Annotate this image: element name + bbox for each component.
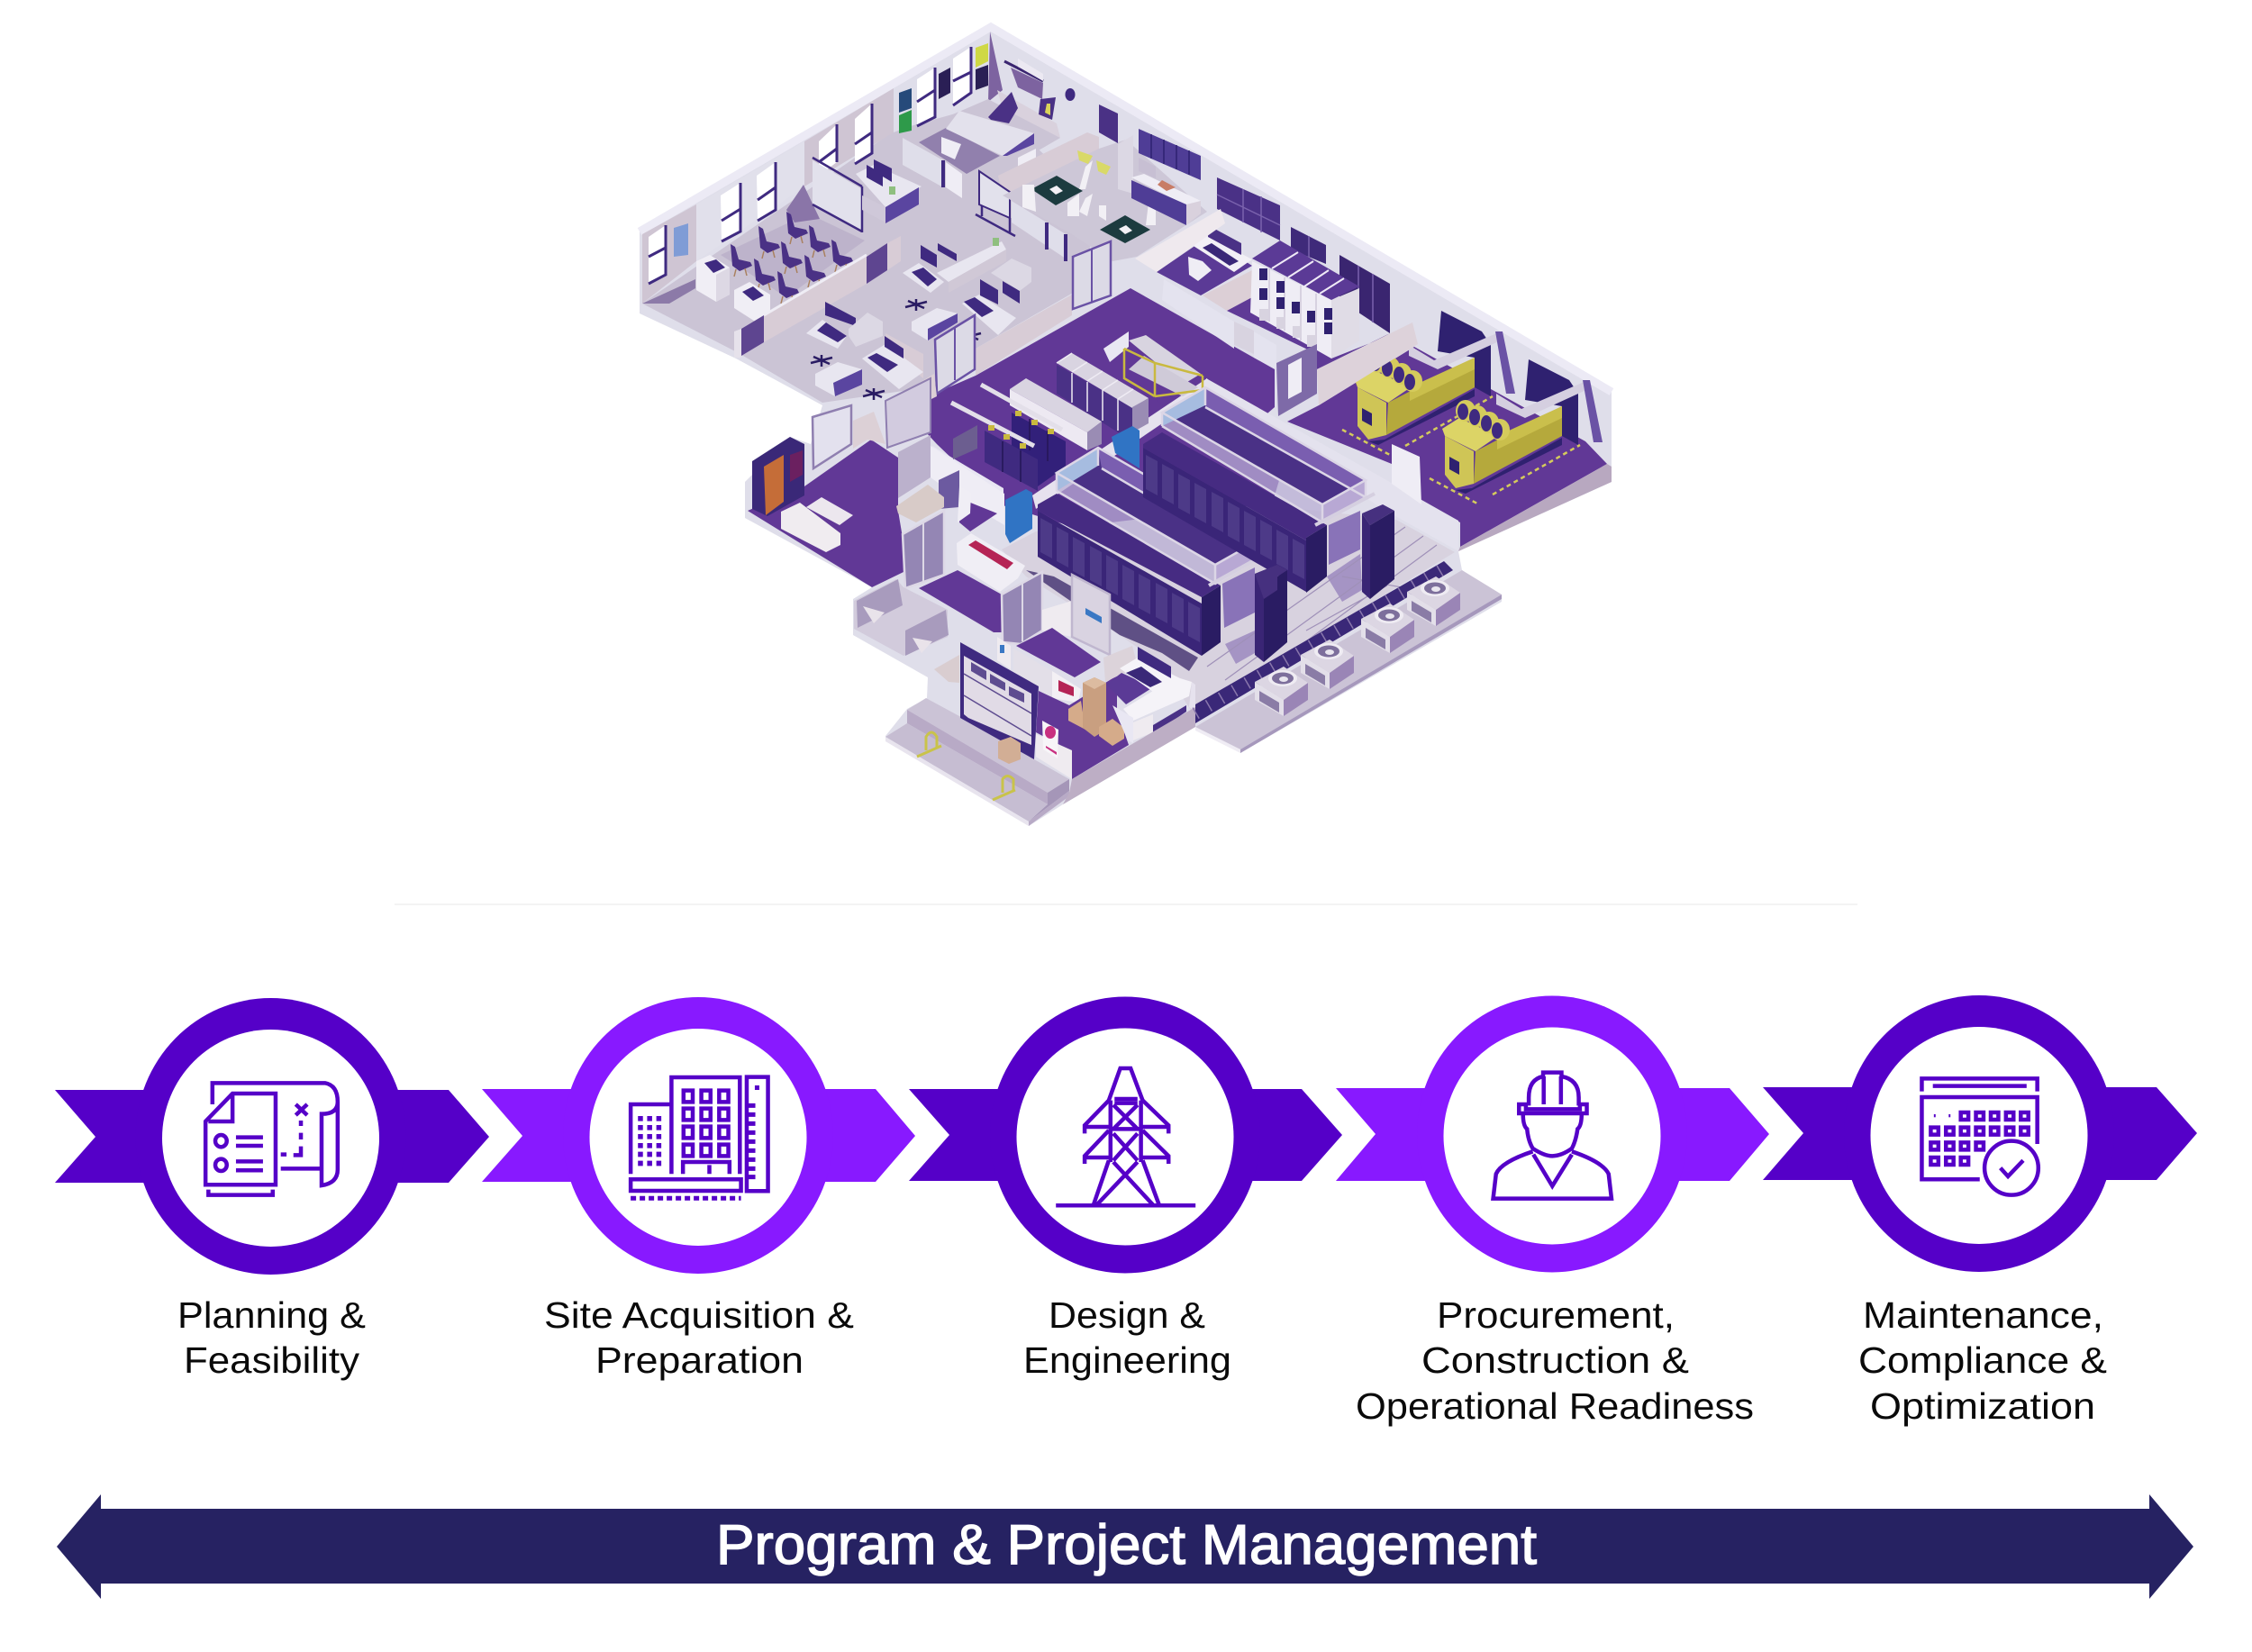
UPS cabinets bbox=[1250, 241, 1359, 359]
icon: buildings and site plan bbox=[631, 1077, 768, 1198]
reception counter lobby bbox=[896, 470, 997, 588]
conference area bbox=[642, 158, 865, 304]
lounge doors and glass bbox=[813, 378, 1004, 525]
double arrow: program and project management bbox=[57, 1494, 2193, 1599]
label 5: Maintenance, bbox=[1863, 1294, 2103, 1336]
cabinet row purple fronts bbox=[1057, 353, 1149, 441]
cafeteria bbox=[1003, 140, 1207, 261]
label 2: Preparation bbox=[595, 1339, 804, 1381]
office floor bbox=[642, 104, 1099, 403]
bollards bbox=[917, 732, 1015, 800]
ribbon 3 bbox=[909, 1089, 1342, 1181]
corridor and server room carpet bbox=[926, 288, 1288, 540]
generators bbox=[1342, 311, 1603, 504]
label 5: Optimization bbox=[1870, 1385, 2095, 1427]
ribbon 2 bbox=[482, 1089, 915, 1182]
label 2: Site Acquisition & bbox=[544, 1294, 854, 1336]
server row B bbox=[1143, 432, 1327, 593]
label 4: Construction & bbox=[1421, 1339, 1689, 1381]
label 3: Engineering bbox=[1023, 1339, 1231, 1381]
circle 2 bbox=[563, 997, 833, 1274]
icon: transmission tower bbox=[1056, 1068, 1195, 1205]
icon: blueprint document bbox=[205, 1083, 338, 1195]
outdoor chiller pad bbox=[1195, 561, 1502, 753]
carpet entry bbox=[1016, 628, 1101, 677]
storage carpet bbox=[1036, 676, 1129, 779]
step 5: maintenance, compliance and optimization bbox=[1763, 995, 2197, 1427]
containment A bbox=[1057, 448, 1266, 628]
chiller units bbox=[1255, 576, 1460, 716]
whiteboard bbox=[976, 171, 1015, 236]
containment B bbox=[1162, 387, 1375, 565]
divider line bbox=[395, 903, 1857, 905]
circle 5 bbox=[1844, 995, 2114, 1272]
label 4: Procurement, bbox=[1437, 1294, 1675, 1336]
vending machines bbox=[752, 437, 804, 516]
main wall to generator room bbox=[1206, 378, 1458, 551]
boxes and signs bbox=[998, 677, 1124, 779]
icon: construction worker bbox=[1494, 1073, 1612, 1199]
step 2: site acquisition and preparation bbox=[482, 997, 915, 1381]
illustration: isometric data center floor plan bbox=[640, 27, 1612, 826]
small office bbox=[1135, 209, 1252, 311]
red seating trough bbox=[957, 533, 1025, 592]
window wall bbox=[642, 32, 1003, 304]
icon: calendar with check bbox=[1921, 1078, 2039, 1195]
ribbon 4 bbox=[1336, 1088, 1769, 1181]
blue doors bbox=[1005, 426, 1140, 543]
building base bbox=[640, 27, 1612, 826]
kitchenette bbox=[1099, 104, 1201, 225]
step 1: planning and feasibility bbox=[55, 998, 489, 1381]
restrooms bbox=[854, 579, 959, 683]
manager office bbox=[901, 59, 1076, 174]
generator room carpet bbox=[1287, 347, 1607, 547]
reception desk bbox=[1103, 646, 1195, 743]
label 3: Design & bbox=[1049, 1294, 1205, 1336]
arrow label: Program & Project Management bbox=[716, 1514, 1537, 1576]
step 3: design and engineering bbox=[909, 996, 1342, 1381]
lobby doors bbox=[1002, 572, 1110, 655]
desks lower cluster bbox=[806, 302, 923, 400]
conference chairs bbox=[731, 212, 853, 304]
label 4: Operational Readiness bbox=[1356, 1385, 1754, 1427]
back room partition bbox=[932, 331, 1212, 513]
tiled floor bbox=[1002, 504, 1455, 712]
lounge carpet bbox=[748, 440, 904, 587]
circle 4 bbox=[1417, 996, 1687, 1272]
UPS room floor bbox=[1227, 297, 1390, 369]
wall panels bbox=[1217, 177, 1390, 333]
label 5: Compliance & bbox=[1858, 1339, 2107, 1381]
server row A bbox=[1038, 494, 1221, 656]
lower building edge bbox=[1063, 707, 1195, 804]
outer rim bbox=[640, 27, 1612, 392]
loading dock steps bbox=[885, 698, 1069, 826]
loading dock door bbox=[960, 642, 1039, 759]
circle 1 bbox=[135, 998, 405, 1275]
desks upper cluster bbox=[856, 159, 1031, 342]
ribbon 5 bbox=[1763, 1087, 2197, 1180]
step 4: procurement, construction and operational readiness bbox=[1336, 996, 1769, 1427]
corridor carpet lower bbox=[919, 570, 1002, 632]
cabinet row grey bbox=[1010, 378, 1102, 450]
label 1: Feasibility bbox=[184, 1339, 360, 1381]
copiers and low walls bbox=[696, 236, 901, 358]
ribbon 1 bbox=[55, 1090, 489, 1183]
yellow shelving bbox=[1124, 335, 1203, 396]
dark racks in back room bbox=[951, 385, 1066, 491]
lounge furniture bbox=[781, 497, 853, 552]
corridor partition walls bbox=[907, 241, 1418, 416]
tall dark racks bbox=[1255, 504, 1394, 662]
wall beside dock bbox=[997, 637, 1081, 703]
office partitions bbox=[903, 132, 1099, 261]
label 1: Planning & bbox=[177, 1294, 366, 1336]
circle 3 bbox=[990, 996, 1260, 1274]
lower right base face bbox=[1458, 464, 1612, 551]
